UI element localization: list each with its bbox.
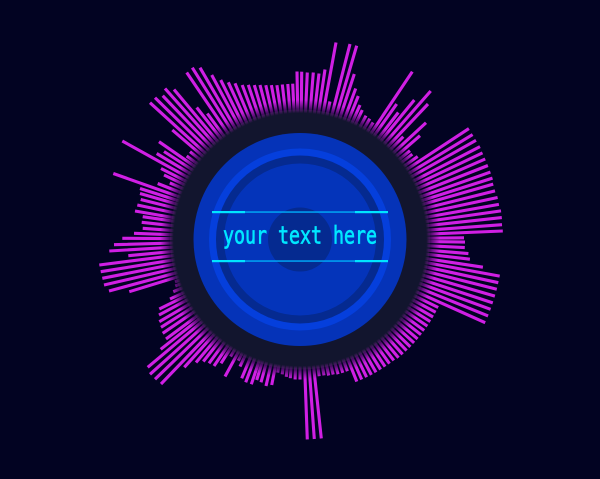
bars: upper left quadrant [113, 68, 300, 240]
title text: your text here [223, 222, 377, 250]
upper text rule [212, 211, 388, 213]
bars: lower left quadrant [99, 240, 300, 386]
bars: lower right quadrant [300, 240, 500, 439]
radial equaliser bars [99, 42, 503, 439]
bars: upper right quadrant [300, 42, 503, 240]
speaker cone [194, 133, 406, 346]
lower text rule [212, 260, 388, 262]
dark outer disc [170, 110, 430, 370]
